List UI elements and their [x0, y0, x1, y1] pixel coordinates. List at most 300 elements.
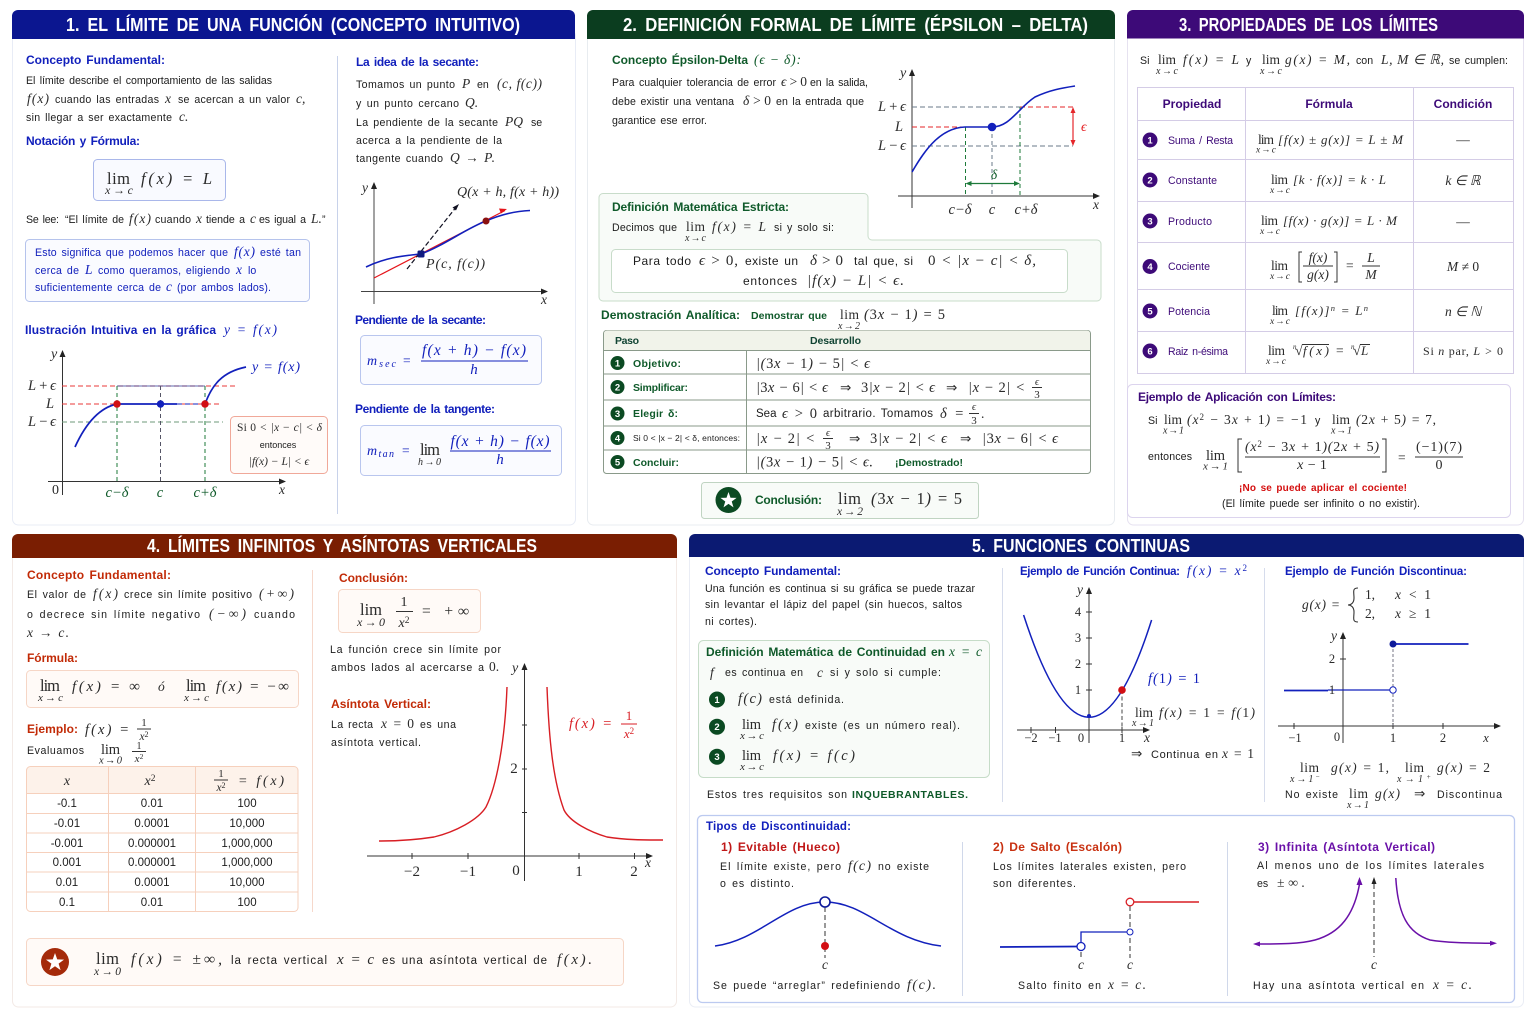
- chart: parábola: y: [1075, 582, 1083, 597]
- chart: épsilon-delta: L+ϵ: [877, 99, 907, 115]
- text block: idea de la secante: PQ: [504, 114, 523, 129]
- requirement 3: f(x) = f(c): [773, 748, 855, 764]
- heading: demostración analítica: Demostración Analítica:: [601, 308, 740, 322]
- table: propiedades: Condición: [1434, 97, 1492, 111]
- formula box: pendiente tangente: [360, 426, 562, 476]
- step 3: .: [981, 406, 984, 421]
- text block: ejemplo: x→0: [98, 756, 123, 766]
- panel: ejemplo de aplicación: Si: [1148, 415, 1157, 427]
- step 2: [610, 377, 1042, 401]
- step 1: [610, 356, 871, 372]
- step 4: ⇒: [960, 431, 972, 446]
- panel 1: el límite de una función: [12, 10, 576, 525]
- step 4: [610, 428, 1059, 452]
- panel 3: propiedades de los límites: [1127, 10, 1524, 525]
- row: potencia: [f(x)]: [1295, 303, 1329, 318]
- panel: definición matemática estricta: ϵ > 0,: [699, 253, 738, 269]
- chart: épsilon-delta: c−δ: [949, 202, 972, 218]
- text block: se lee: “El límite de: [65, 214, 124, 226]
- text block: crece sin límite: La función crece sin límite por: [330, 644, 501, 656]
- row: raíz n-ésima: Si n par, L > 0: [1423, 344, 1503, 358]
- table: valores de 1/x²: 1,000,000: [221, 838, 273, 850]
- panel 5: funciones continuas: [689, 534, 1524, 1007]
- chart: parábola: 2: [1075, 657, 1081, 671]
- formula box: conclusión: = +∞: [421, 603, 469, 620]
- requirement 2: x→c: [739, 730, 764, 742]
- panel: ejemplo de aplicación: =: [1398, 450, 1406, 465]
- requirement 3: 3: [714, 752, 720, 763]
- callout: épsilon condición: Si 0 < |x − c| < δ: [237, 422, 323, 434]
- text block: idea de la secante: acerca a la pendiente de la: [356, 135, 502, 147]
- heading: ilustración intuitiva: y = f(x): [222, 322, 278, 337]
- chart: f(x) = 1/x²: 1: [626, 708, 632, 723]
- icon: star: [716, 487, 742, 513]
- formula box: límites infinitos: [26, 670, 298, 708]
- chart: límite intuitivo: L: [45, 396, 54, 412]
- type 1: evitable: f(c): [848, 859, 871, 874]
- chart: función escalón: [1278, 628, 1501, 745]
- chart: función escalón: 0: [1334, 730, 1340, 744]
- formula: función a trozos: 1,: [1365, 587, 1375, 602]
- formula box: pendiente tangente: tan: [378, 449, 394, 460]
- text block: ejemplo: f(x) =: [85, 722, 129, 738]
- formula box: límites infinitos: lim: [186, 676, 206, 695]
- panel: ejemplo de aplicación: y: [1315, 415, 1321, 427]
- chart: función escalón: x: [1482, 731, 1489, 745]
- table: valores de 1/x²: x: [216, 782, 222, 794]
- step 5: Concluir:: [633, 457, 679, 469]
- row: producto: 3: [1147, 216, 1153, 228]
- chart: parábola: 4: [1075, 605, 1082, 619]
- type 2: de salto: [993, 840, 1199, 992]
- step 5: |(3x − 1) − 5| < ϵ.: [756, 454, 873, 470]
- chart: f(x) = 1/x²: [367, 661, 663, 881]
- formula box: pendiente secante: sec: [379, 359, 397, 370]
- text block: tolerancia: en la entrada que: [776, 96, 864, 108]
- text block: tolerancia: en la salida,: [810, 77, 868, 89]
- row: cociente: lim: [1271, 258, 1288, 273]
- panel: definición matemática estricta: lim: [686, 219, 705, 234]
- panel 1 card: [12, 30, 576, 525]
- formula box: definición de límite: [94, 160, 226, 200]
- type 1: evitable: El límite existe, pero: [720, 861, 841, 873]
- chart: épsilon-delta: δ: [991, 167, 998, 182]
- text block: inquebrantables: INQUEBRANTABLES.: [852, 789, 968, 801]
- panel: ejemplo de aplicación: 0: [1436, 458, 1442, 473]
- text block: idea de la secante: y un punto cercano: [356, 98, 459, 110]
- callout: asíntota vertical: f(x) = ±∞,: [131, 951, 222, 968]
- text block: se lee: ”: [322, 214, 326, 226]
- text block: concepto de continuidad: ni cortes).: [705, 616, 757, 628]
- formula box: límites infinitos: x→c: [183, 692, 209, 704]
- formula box: límites infinitos: f(x) = −∞: [216, 679, 289, 695]
- step 3: 3: [971, 415, 977, 427]
- formula box: conclusión: x→0: [356, 615, 385, 629]
- chart: parábola: Continua en: [1151, 749, 1218, 761]
- row: cociente: 4: [1147, 262, 1153, 273]
- type 2: de salto: Salto finito en: [1018, 980, 1101, 992]
- text block: concepto: f(x): [93, 586, 118, 601]
- chart: f(x) = 1/x²: x: [644, 855, 651, 870]
- row: potencia: n: [1331, 303, 1335, 313]
- chart: límite intuitivo: L−ϵ: [27, 414, 57, 430]
- row: raíz n-ésima: n: [1351, 343, 1355, 351]
- step 3: ϵ: [972, 402, 977, 413]
- chart: secante y tangente: y: [360, 180, 368, 195]
- step 5: ¡Demostrado!: [895, 457, 963, 469]
- divider: [312, 570, 314, 912]
- chart: hueco: c: [822, 957, 828, 972]
- chart: función escalón: y: [1329, 628, 1337, 643]
- text block: asíntota vertical: asíntota vertical.: [331, 737, 421, 749]
- formula box: conclusión: [338, 590, 480, 632]
- panel: ejemplo de aplicación: (−1)(7): [1416, 440, 1462, 455]
- row: cociente: =: [1346, 258, 1354, 273]
- text block: concepto fundamental: cuando las entradas: [55, 94, 159, 106]
- row: constante: 2: [1147, 176, 1153, 186]
- step 1: Objetivo:: [633, 358, 681, 370]
- chart: parábola: 1: [1075, 683, 1081, 697]
- chart: épsilon-delta: y: [898, 66, 907, 81]
- formula box: conclusión: 1: [400, 595, 408, 610]
- table: valores de 1/x²: 0.000001: [128, 838, 176, 850]
- text block: se lee: cuando: [155, 214, 191, 226]
- row: producto: Producto: [1168, 216, 1212, 228]
- formula box: pendiente tangente: h→0: [418, 457, 441, 468]
- text block: hipótesis: L, M ∈ ℝ,: [1380, 52, 1444, 67]
- callout: asíntota vertical: la recta vertical: [231, 955, 327, 967]
- panel: definición de continuidad: f: [710, 665, 716, 680]
- chart: parábola: f(1) = 1: [1148, 671, 1200, 687]
- step 4: 3: [825, 440, 831, 452]
- text block: idea de la secante: La pendiente de la secante: [356, 117, 498, 129]
- table: valores de 1/x²: 0.01: [141, 798, 163, 810]
- chart: función escalón: 1: [1329, 683, 1335, 697]
- chart: épsilon-delta: ϵ: [1081, 120, 1088, 135]
- chart: f(x) = 1/x²: y: [510, 661, 519, 676]
- row: raíz n-ésima: n: [1293, 343, 1297, 351]
- text block: hipótesis: x→c: [1155, 66, 1179, 77]
- row: suma / resta: lim: [1258, 132, 1274, 147]
- table: valores de 1/x²: -0.01: [54, 818, 80, 830]
- panel: ejemplo de aplicación: x→1: [1202, 460, 1228, 472]
- type 3: infinita: ±∞.: [1277, 875, 1305, 890]
- panel: ejemplo de aplicación: 3x + 1) = −1: [1224, 412, 1307, 427]
- table: valores de 1/x²: 2: [151, 774, 156, 784]
- table: propiedades: [1137, 87, 1514, 374]
- heading: pendiente de la tangente: Pendiente de la tangente:: [355, 402, 495, 416]
- text block: límites laterales: lim: [1349, 786, 1368, 801]
- formula box: límites infinitos: x→c: [37, 692, 63, 704]
- chart: parábola: 1: [1119, 731, 1125, 745]
- chart: límite intuitivo: y = f(x): [250, 360, 300, 375]
- callout: asíntota vertical: es una asíntota vertical de: [382, 955, 547, 967]
- step 4: 4: [615, 434, 621, 444]
- panel: definición de continuidad: es continua en: [725, 667, 803, 679]
- text block: hipótesis: lim: [1158, 52, 1176, 67]
- requirement 2: 2: [714, 722, 720, 733]
- panel: definición matemática estricta: entonces: [743, 274, 797, 288]
- panel: definición de continuidad: [698, 640, 990, 778]
- chart: hueco: [715, 897, 941, 972]
- panel 1 header bar: [12, 10, 575, 39]
- chart: parábola: 3: [1075, 631, 1081, 645]
- row: raíz n-ésima: Raiz n-ésima: [1168, 346, 1228, 358]
- panel: definición de continuidad: si y solo si cumple:: [830, 667, 941, 679]
- text block: concepto fundamental: [26, 75, 305, 124]
- step 4: |3x − 6| < ϵ: [982, 431, 1059, 447]
- formula box: definición de límite: lim: [107, 169, 130, 188]
- chart: límite intuitivo: x: [278, 482, 285, 497]
- row: cociente: M ≠ 0: [1446, 259, 1479, 274]
- text block: se lee: x: [195, 211, 202, 226]
- chart: épsilon-delta: c: [989, 202, 996, 218]
- table: valores de 1/x²: 100: [237, 798, 257, 810]
- type 2: de salto: Los límites laterales existen, pero: [993, 861, 1186, 873]
- text block: concepto: crece sin límite positivo: [124, 589, 252, 601]
- step 2: ⇒: [946, 380, 958, 395]
- formula box: pendiente secante: h: [470, 362, 478, 378]
- requirement 2: f(x): [772, 717, 798, 733]
- chart: límite intuitivo: 0: [52, 483, 59, 498]
- type 3: infinita: x = c.: [1432, 977, 1472, 992]
- callout: significado: L: [84, 262, 93, 277]
- panel: tipos de discontinuidad: Tipos de Discontinuidad:: [706, 821, 851, 833]
- text block: asíntota vertical: [331, 716, 456, 749]
- panel: definición matemática estricta: Decimos que: [612, 222, 677, 234]
- step 2: 2: [615, 382, 620, 394]
- chart: f(x) = 1/x²: 2: [630, 864, 638, 880]
- text block: asíntota vertical: x = 0: [380, 716, 414, 731]
- row: suma / resta: [1142, 132, 1470, 156]
- text block: concepto: [26, 586, 295, 640]
- panel: ejemplo de aplicación: lim: [1206, 448, 1226, 464]
- chart: parábola: lim: [1135, 705, 1153, 720]
- heading: ejemplo función continua: Ejemplo de Función Continua:: [1020, 566, 1180, 578]
- step 3: ϵ > 0: [782, 406, 817, 422]
- text block: ejemplo: x: [139, 731, 145, 743]
- chart: parábola: ⇒: [1131, 746, 1143, 761]
- row: producto: —: [1455, 214, 1470, 229]
- text block: hipótesis: Si: [1140, 55, 1149, 67]
- text block: idea de la secante: Q → P.: [450, 150, 495, 165]
- text block: asíntota vertical: La recta: [331, 719, 373, 731]
- panel: ejemplo de aplicación: x→1: [1330, 426, 1352, 436]
- panel: definición matemática estricta: si y solo si:: [774, 222, 834, 234]
- chart: f(x) = 1/x²: 0: [512, 863, 520, 879]
- table: valores de 1/x²: 0.000001: [128, 857, 176, 869]
- panel: ejemplo de aplicación: Ejemplo de Aplicación con Límites:: [1138, 390, 1336, 404]
- text block: tolerancia: [612, 74, 868, 127]
- text block: hipótesis: [1140, 52, 1508, 77]
- chart: parábola: x = 1: [1221, 746, 1254, 761]
- table: valores de 1/x²: 100: [237, 897, 257, 909]
- text block: concepto: x → c.: [26, 625, 69, 640]
- text block: hipótesis: f(x) = L: [1183, 52, 1239, 67]
- callout: épsilon condición: [230, 416, 328, 474]
- table: valores de 1/x²: 2: [222, 781, 226, 790]
- panel: definición matemática estricta: f(x) = L: [712, 219, 766, 234]
- panel 4: límites infinitos y asíntotas verticales: [12, 534, 677, 1007]
- table: valores de 1/x²: 0.0001: [134, 818, 170, 830]
- table: valores de 1/x²: 0.001: [53, 857, 81, 869]
- requirement 3: x→c: [739, 761, 764, 773]
- row: potencia: 5: [1147, 306, 1153, 318]
- text block: inquebrantables: Estos tres requisitos son: [707, 789, 847, 801]
- row: producto: lim: [1261, 213, 1278, 228]
- chart: secante y tangente: x: [540, 292, 547, 307]
- text block: límites laterales: x→1: [1290, 774, 1313, 785]
- callout: conclusión: lim: [838, 489, 861, 508]
- chart: función escalón: −1: [1288, 731, 1302, 745]
- panel: ejemplo de aplicación: entonces: [1148, 451, 1192, 463]
- row: raíz n-ésima: √: [1353, 344, 1361, 359]
- text block: concepto fundamental: se acercan a un valor: [178, 94, 290, 106]
- panel 5 title: 5. FUNCIONES CONTINUAS: [972, 536, 1190, 556]
- text block: límites laterales: x→1: [1397, 774, 1423, 785]
- requirement 2: lim: [742, 717, 762, 733]
- panel: ejemplo de aplicación: x − 1: [1296, 458, 1327, 473]
- row: constante: k ∈ ℝ: [1445, 173, 1482, 188]
- callout: asíntota vertical: lim: [96, 949, 119, 968]
- heading: asíntota vertical: Asíntota Vertical:: [331, 697, 431, 711]
- row: suma / resta: 1: [1147, 136, 1153, 146]
- panel: ejemplo de aplicación: −: [1263, 440, 1281, 455]
- panel 2 header bar: [587, 10, 1115, 39]
- formula box: conclusión: x: [399, 616, 405, 631]
- text block: concepto: cuando: [254, 609, 295, 621]
- type 3: infinita: Al menos uno de los límites laterales: [1257, 860, 1484, 872]
- chart: asíntota: [1253, 877, 1497, 972]
- heading: ejemplo función continua: 2: [1242, 563, 1247, 573]
- text block: límites laterales: No existe: [1285, 789, 1338, 801]
- chart: límite intuitivo: y: [49, 347, 58, 362]
- table: valores de 1/x²: [26, 766, 298, 912]
- row: producto: [1142, 213, 1470, 237]
- chart: asíntota: c: [1371, 957, 1377, 972]
- row: raíz n-ésima: x→c: [1265, 357, 1287, 367]
- panel 2 card: [588, 30, 1114, 525]
- chart: f(x) = 1/x²: x: [624, 726, 630, 741]
- text block: límites laterales: g(x): [1375, 786, 1400, 801]
- chart: épsilon-delta: c+δ: [1015, 202, 1038, 218]
- chart: parábola: x→1: [1131, 718, 1154, 729]
- panel: definición matemática estricta: Para todo: [633, 254, 691, 268]
- callout: significado: f(x): [234, 244, 256, 259]
- chart: f(x) = 1/x²: 2: [510, 761, 518, 777]
- table: valores de 1/x²: -0.001: [51, 838, 83, 850]
- row: suma / resta: x→c: [1255, 146, 1277, 156]
- heading: demostración analítica: (3x − 1) = 5: [864, 307, 945, 323]
- type 3: infinita: 3) Infinita (Asíntota Vertical): [1258, 840, 1435, 854]
- chart: parábola: x: [1143, 730, 1150, 745]
- requirement 2: [709, 717, 960, 742]
- formula box: pendiente secante: f(x + h) − f(x): [422, 342, 526, 359]
- panel: ejemplo de aplicación: 2: [1257, 439, 1262, 449]
- chart: f(x) = 1/x²: f(x) =: [569, 716, 612, 732]
- row: potencia: Potencia: [1168, 306, 1210, 318]
- type 1: evitable: no existe: [878, 861, 929, 873]
- text block: idea de la secante: [356, 76, 542, 165]
- table: pasos de la demostración: Paso: [615, 335, 639, 347]
- text block: se lee: L.: [310, 211, 322, 226]
- chart: parábola: [1017, 582, 1256, 761]
- requirement 3: [709, 748, 855, 773]
- formula box: límites infinitos: lim: [40, 676, 60, 695]
- chart: épsilon-delta: L−ϵ: [877, 138, 907, 154]
- requirement 2: existe (es un número real).: [805, 720, 960, 732]
- text block: inquebrantables: [707, 789, 968, 801]
- callout: épsilon condición: entonces: [260, 440, 297, 450]
- panel 1 title: 1. EL LÍMITE DE UNA FUNCIÓN (CONCEPTO INTUITIVO): [66, 14, 520, 35]
- heading: concepto épsilon-delta: (ϵ − δ):: [754, 52, 801, 67]
- formula box: pendiente tangente: f(x + h) − f(x): [450, 433, 550, 450]
- formula: función a trozos: x < 1: [1394, 587, 1431, 602]
- type 1: evitable: Se puede “arreglar” redefiniendo: [713, 980, 900, 992]
- row: raíz n-ésima: 6: [1147, 346, 1153, 358]
- text block: crece sin límite: ambos lados al acercarse a: [331, 662, 484, 674]
- panel: ejemplo de aplicación: (x: [1245, 440, 1257, 455]
- chart: épsilon-delta: L: [894, 119, 903, 135]
- panel: ejemplo de aplicación: lim: [1332, 412, 1350, 427]
- text block: idea de la secante: P: [461, 76, 470, 91]
- chart: secante y tangente: Q(x + h, f(x + h)): [457, 185, 559, 200]
- callout: asíntota vertical: x = c: [336, 952, 374, 968]
- panel 4 title: 4. LÍMITES INFINITOS Y ASÍNTOTAS VERTICALES: [147, 535, 537, 556]
- text block: crece sin límite: 0.: [489, 659, 499, 674]
- heading: ejemplo función continua: f(x) = x: [1187, 563, 1241, 578]
- step 1: 1: [615, 358, 621, 370]
- text block: se lee: [26, 211, 326, 226]
- heading: ejemplo función discontinua: Ejemplo de Función Discontinua:: [1285, 566, 1467, 578]
- type 3: infinita: Hay una asíntota vertical en: [1253, 980, 1424, 992]
- step 3: Sea: [756, 408, 777, 420]
- panel: definición de continuidad: x = c: [948, 644, 982, 659]
- text block: concepto fundamental: sin llegar a ser exactamente: [26, 112, 172, 124]
- panel: definición matemática estricta: |f(x) − L| < ϵ.: [807, 273, 904, 289]
- panel: ejemplo de aplicación: (2x + 5) = 7,: [1356, 412, 1436, 427]
- text block: límites laterales: ⇒: [1414, 786, 1426, 801]
- callout: asíntota vertical: [26, 938, 624, 986]
- row: raíz n-ésima: f(x): [1303, 343, 1329, 358]
- formula: función a trozos: x ≥ 1: [1394, 606, 1431, 621]
- text block: hipótesis: se cumplen:: [1449, 55, 1508, 67]
- formula: función a trozos: 2,: [1365, 606, 1375, 621]
- callout: significado: x: [235, 262, 242, 277]
- text block: límites laterales: −: [1315, 773, 1320, 781]
- heading: concepto fundamental: Concepto Fundamental:: [27, 568, 171, 582]
- row: raíz n-ésima: √: [1295, 344, 1303, 359]
- type 2: de salto: son diferentes.: [993, 878, 1076, 890]
- panel: definición matemática estricta: [599, 194, 1101, 301]
- formula box: pendiente tangente: h: [496, 452, 504, 468]
- chart: límite intuitivo: L+ϵ: [27, 378, 57, 394]
- panel: ejemplo de aplicación: (x: [1187, 412, 1199, 427]
- row: suma / resta: —: [1455, 132, 1470, 147]
- text block: ejemplo: x: [135, 753, 140, 765]
- table: pasos de la demostración: Desarrollo: [810, 335, 861, 347]
- text block: concepto: (+∞): [259, 586, 294, 601]
- text block: tolerancia: garantice ese error.: [612, 115, 707, 127]
- requirement 3: lim: [742, 748, 762, 764]
- callout: significado: c: [166, 279, 172, 294]
- row: cociente: g(x): [1307, 267, 1329, 282]
- callout: asíntota vertical: f(x).: [557, 952, 592, 968]
- divider: [1002, 568, 1264, 802]
- table: propiedades: Propiedad: [1163, 97, 1221, 111]
- chart: escalón: [1000, 898, 1199, 972]
- table: valores de 1/x²: 1,000,000: [221, 857, 273, 869]
